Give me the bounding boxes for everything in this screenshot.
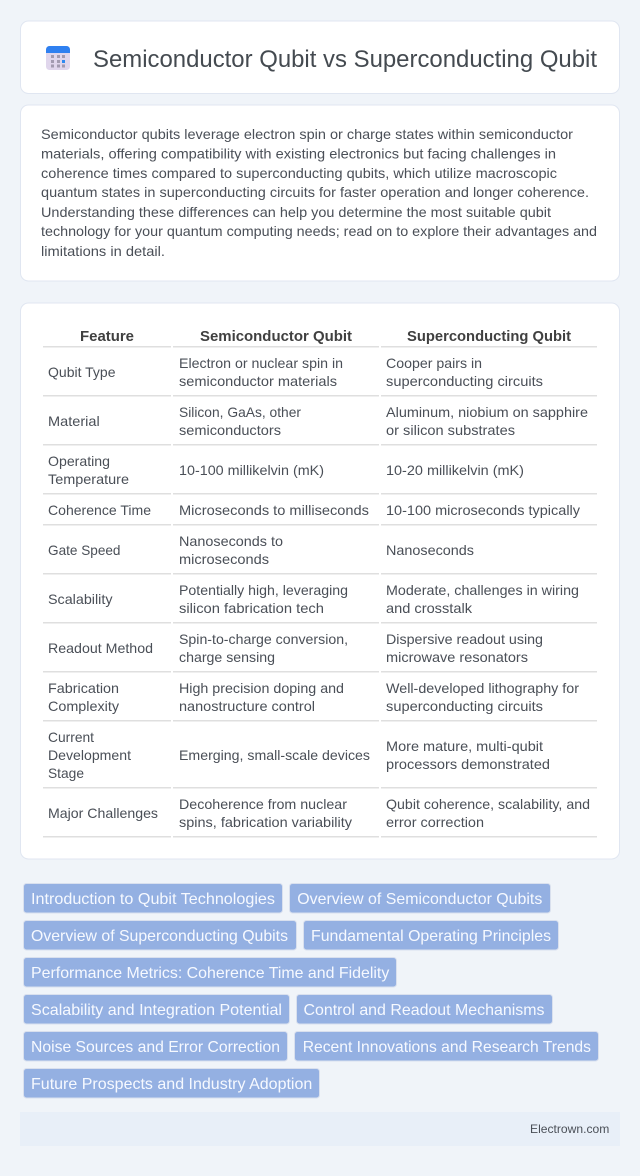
table header row: Feature <box>80 328 134 345</box>
tag: Noise Sources and Error Correction <box>24 1032 288 1061</box>
table row: Gate Speed: Nanoseconds <box>386 542 474 558</box>
table row: Current Development Stage <box>43 729 597 788</box>
table row: Operating Temperature: Operating <box>48 453 110 469</box>
text block: introduction paragraph: Semiconductor qubits leverage electron spin or charge states within semiconductor <box>41 126 573 142</box>
text block: introduction paragraph: technology for your quantum computing needs; read on to explore their advantages and <box>41 223 597 239</box>
table row: Scalability: Moderate, challenges in wiring <box>386 582 579 598</box>
table row: Fabrication Complexity: Well-developed lithography for <box>386 680 579 696</box>
table row: Fabrication Complexity: Fabrication <box>48 680 119 696</box>
table row: Scalability: and crosstalk <box>386 600 473 616</box>
tag: Overview of Semiconductor Qubits: Overview of Semiconductor Qubits <box>297 891 542 908</box>
text block: introduction paragraph <box>41 126 597 259</box>
table row: Scalability <box>43 582 597 624</box>
tag: Fundamental Operating Principles <box>304 920 558 950</box>
tag: Control and Readout Mechanisms <box>296 994 552 1024</box>
table row: Qubit Type <box>43 355 597 396</box>
table row: Fabrication Complexity: Complexity <box>48 698 119 714</box>
table row: Readout Method: Readout Method <box>48 640 153 656</box>
footer credit: Electrown.com <box>530 1122 609 1136</box>
table row: Qubit Type: Qubit Type <box>48 364 116 380</box>
text block: introduction paragraph: limitations in detail. <box>41 243 165 259</box>
table row: Fabrication Complexity <box>43 680 597 722</box>
tag: Overview of Superconducting Qubits <box>24 920 296 950</box>
text block: introduction paragraph: coherence times compared to superconducting qubits, which utilize macroscopic <box>41 165 557 181</box>
table row: Qubit Type: superconducting circuits <box>386 373 543 389</box>
table row: Current Development Stage: Development <box>48 747 131 763</box>
tag: Noise Sources and Error Correction: Noise Sources and Error Correction <box>31 1039 280 1056</box>
table row: Material <box>43 404 597 446</box>
table row: Operating Temperature: 10-20 millikelvin (mK) <box>386 462 524 478</box>
table row: Qubit Type: semiconductor materials <box>179 373 337 389</box>
tag: Recent Innovations and Research Trends: Recent Innovations and Research Trends <box>303 1039 591 1056</box>
table row: Coherence Time: Microseconds to milliseconds <box>179 502 369 518</box>
table row: Readout Method <box>43 631 597 672</box>
table row: Scalability: Potentially high, leveraging <box>179 582 348 598</box>
text block: introduction paragraph: materials, offering compatibility with existing electronics but facing challenges in <box>41 146 556 162</box>
tag: Future Prospects and Industry Adoption: Future Prospects and Industry Adoption <box>31 1076 312 1093</box>
tag: Control and Readout Mechanisms: Control and Readout Mechanisms <box>304 1002 544 1019</box>
table row: Qubit Type: Cooper pairs in <box>386 355 482 371</box>
table row: Coherence Time: Coherence Time <box>48 502 151 518</box>
tag: Recent Innovations and Research Trends <box>294 1032 598 1061</box>
table row: Material: Aluminum, niobium on sapphire <box>386 404 588 420</box>
table row: Scalability: Scalability <box>48 591 112 607</box>
table row: Gate Speed: Gate Speed <box>48 542 120 558</box>
table row: Scalability: silicon fabrication tech <box>179 600 324 616</box>
title: Semiconductor Qubit vs Superconducting Qubit <box>93 46 597 73</box>
table row: Operating Temperature: Temperature <box>48 471 129 487</box>
table row: Gate Speed: Nanoseconds to <box>179 533 283 549</box>
table row: Fabrication Complexity: superconducting circuits <box>386 698 543 714</box>
footer bar <box>20 1112 620 1146</box>
table row: Readout Method: charge sensing <box>179 649 275 665</box>
tag: Overview of Semiconductor Qubits <box>290 884 550 913</box>
table row: Operating Temperature: 10-100 millikelvin (mK) <box>179 462 324 478</box>
table row: Current Development Stage: processors demonstrated <box>386 756 550 772</box>
table row: Material: semiconductors <box>179 422 281 438</box>
table row: Fabrication Complexity: High precision doping and <box>179 680 344 696</box>
table row: Readout Method: microwave resonators <box>386 649 528 665</box>
panel: title header <box>20 21 620 94</box>
table row: Fabrication Complexity: nanostructure control <box>179 698 315 714</box>
table row: Major Challenges: Major Challenges <box>48 805 158 821</box>
tag: Overview of Superconducting Qubits: Overview of Superconducting Qubits <box>31 928 288 945</box>
tag: Scalability and Integration Potential: Scalability and Integration Potential <box>31 1002 282 1019</box>
table row: Gate Speed <box>43 533 597 574</box>
text block: introduction paragraph: quantum states in superconducting circuits for faster operation and longer coherence. <box>41 184 589 200</box>
table row: Current Development Stage: More mature, multi-qubit <box>386 738 543 754</box>
tag: Introduction to Qubit Technologies <box>24 884 282 913</box>
table row: Readout Method: Spin-to-charge conversion, <box>179 631 348 647</box>
table row: Current Development Stage: Current <box>48 729 94 745</box>
table row: Readout Method: Dispersive readout using <box>386 631 543 647</box>
panel: introduction <box>20 105 620 281</box>
table row: Operating Temperature <box>43 453 597 494</box>
table header row <box>43 328 597 348</box>
table row: Major Challenges <box>43 796 597 838</box>
table row: Coherence Time: 10-100 microseconds typically <box>386 502 580 518</box>
topic tags <box>24 884 598 1098</box>
tag: Fundamental Operating Principles: Fundamental Operating Principles <box>311 928 551 945</box>
table row: Major Challenges: Decoherence from nuclear <box>179 796 347 812</box>
table row: Coherence Time <box>43 502 597 526</box>
table row: Gate Speed: microseconds <box>179 551 269 567</box>
tag: Introduction to Qubit Technologies: Introduction to Qubit Technologies <box>31 891 275 908</box>
table row: Material: Material <box>48 413 100 429</box>
tag: Future Prospects and Industry Adoption <box>24 1068 320 1098</box>
table row: Current Development Stage: Stage <box>48 765 84 781</box>
table row: Major Challenges: Qubit coherence, scalability, and <box>386 796 590 812</box>
table header row: Semiconductor Qubit <box>200 328 352 345</box>
tag: Scalability and Integration Potential <box>24 994 290 1024</box>
table row: Current Development Stage: Emerging, small-scale devices <box>179 747 370 763</box>
table header row: Superconducting Qubit <box>407 328 571 345</box>
icon: calendar grid <box>46 46 70 70</box>
table row: Qubit Type: Electron or nuclear spin in <box>179 355 343 371</box>
text block: introduction paragraph: Understanding these differences can help you determine the most suitable qubit <box>41 204 551 220</box>
table row: Major Challenges: spins, fabrication variability <box>179 814 352 830</box>
table row: Major Challenges: error correction <box>386 814 484 830</box>
table row: Material: or silicon substrates <box>386 422 515 438</box>
tag: Performance Metrics <box>24 958 396 987</box>
tag: Performance Metrics: Performance Metrics: Coherence Time and Fidelity <box>31 965 389 982</box>
panel: comparison table <box>20 303 620 859</box>
table row: Material: Silicon, GaAs, other <box>179 404 301 420</box>
